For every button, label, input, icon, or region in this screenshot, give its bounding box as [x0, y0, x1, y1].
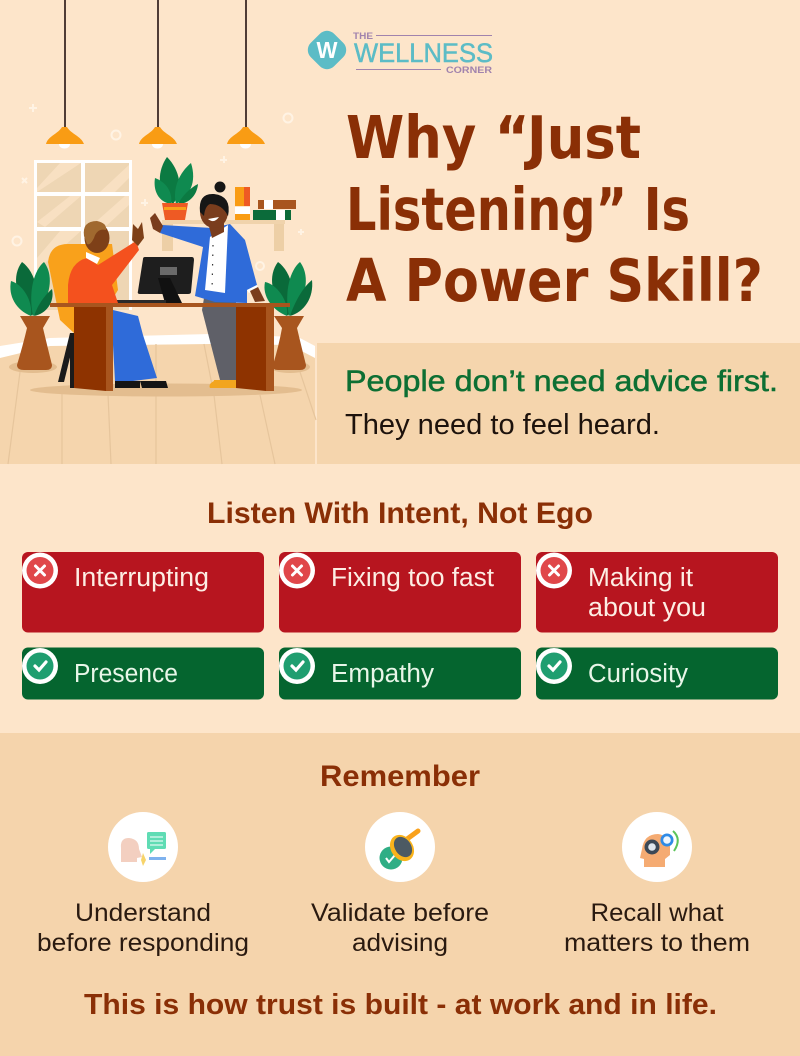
heading: remember: Remember [320, 760, 481, 793]
subtitle band: People don’t need advice first. [345, 365, 778, 398]
floor and skirting [0, 334, 316, 464]
title: Why “Just [346, 103, 641, 172]
title: Listening” Is [346, 175, 690, 244]
card: fixing too fast: Fixing too fast [331, 564, 494, 592]
card: interrupting: Interrupting [74, 564, 209, 592]
text: understand: before responding [37, 929, 249, 957]
card: making it about you: Making it [588, 564, 693, 592]
text: understand: Understand [75, 899, 211, 927]
text: understand [37, 899, 249, 957]
card: curiosity: Curiosity [588, 660, 688, 688]
illustration: office high five [0, 0, 317, 464]
text: validate: advising [352, 929, 448, 957]
subtitle band: They need to feel heard. [345, 409, 660, 441]
logo mark [304, 27, 350, 73]
sparkles [12, 104, 304, 270]
card: fixing too fast [279, 552, 521, 632]
subtitle band [317, 343, 800, 464]
card: empathy [279, 648, 521, 700]
text: recall [564, 899, 750, 957]
icon: validate stamp [365, 812, 435, 882]
panel: remember [0, 733, 800, 1056]
card: making it about you: about you [588, 594, 706, 622]
card: presence: Presence [74, 660, 178, 688]
logo mark: W [316, 37, 338, 63]
chair [48, 244, 118, 388]
text: validate [311, 899, 489, 957]
heading: listen with intent: Listen With Intent, Not Ego [207, 497, 593, 530]
potted plant on shelf [155, 157, 198, 220]
icon: understand [108, 812, 178, 882]
card: curiosity [536, 648, 778, 700]
logo: The Wellness Corner: CORNER [446, 65, 493, 75]
text: recall: matters to them [564, 929, 750, 957]
shelf [162, 220, 285, 251]
closing line: This is how trust is built - at work and in life. [84, 989, 717, 1021]
card: making it about you [536, 552, 778, 632]
logo: The Wellness Corner [304, 27, 493, 75]
floor shadows [9, 361, 310, 396]
standing woman [150, 182, 265, 388]
window [34, 160, 132, 310]
card: presence [22, 648, 264, 700]
icon: recall head [622, 812, 692, 882]
desk [50, 303, 290, 391]
logo: The Wellness Corner: THE [353, 31, 373, 41]
right plant [264, 262, 312, 370]
monitor [108, 257, 194, 303]
text: validate: Validate before [311, 899, 489, 927]
pendant lamps [46, 0, 265, 148]
title [346, 103, 763, 315]
books [235, 187, 296, 220]
card: empathy: Empathy [331, 660, 434, 688]
left plant [10, 262, 53, 370]
logo: The Wellness Corner: WELLNESS [354, 38, 493, 68]
seated man [68, 221, 168, 388]
card: interrupting [22, 552, 264, 632]
text: recall: Recall what [590, 899, 724, 927]
